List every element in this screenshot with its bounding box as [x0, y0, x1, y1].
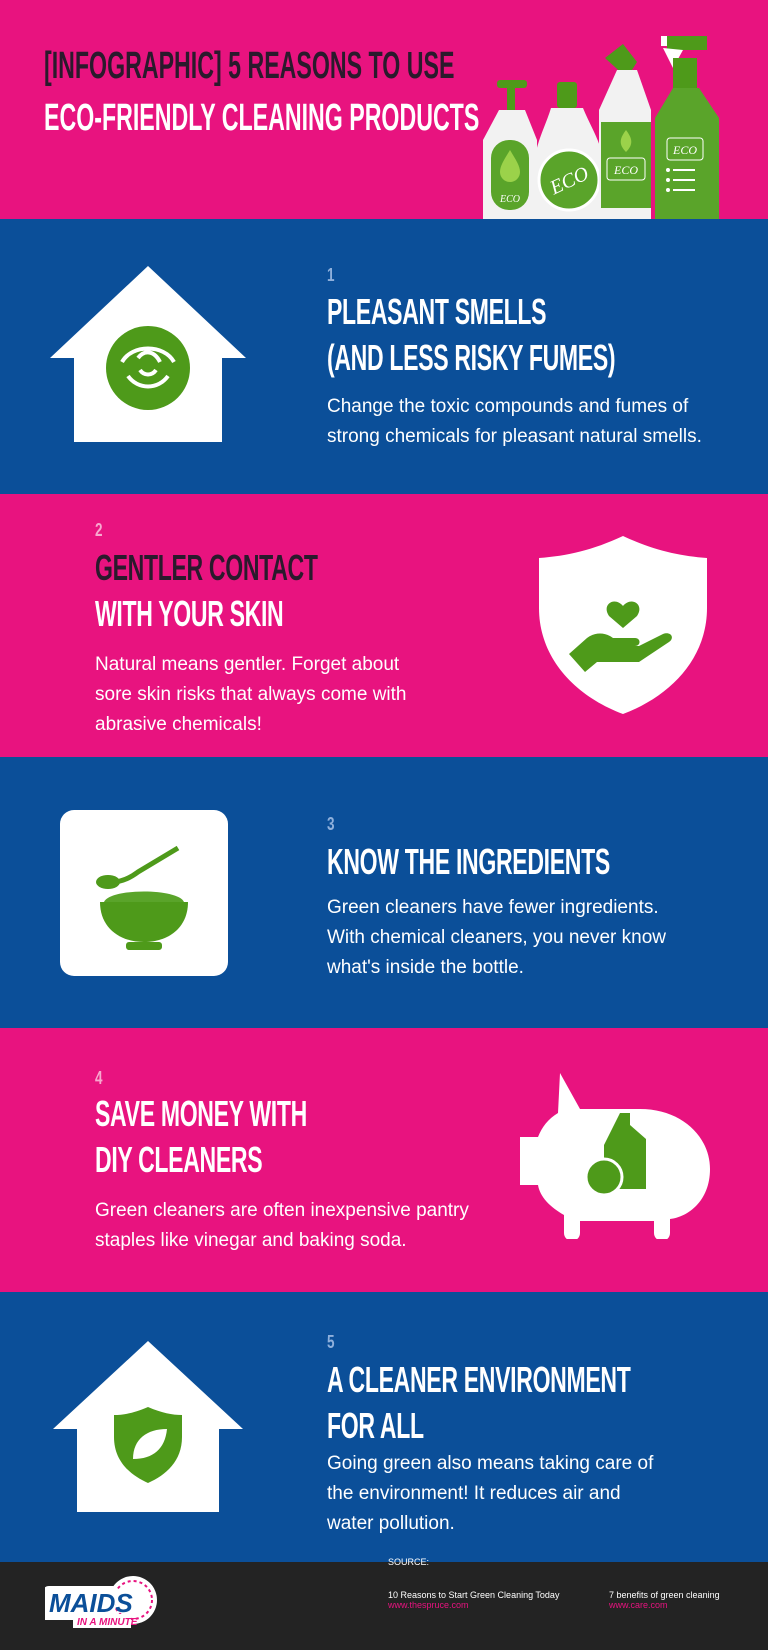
number 3: 3 — [327, 814, 335, 834]
panel: 5 cleaner environment — [0, 1292, 768, 1562]
number 1: 1 — [327, 265, 335, 285]
sources: www.thespruce.com — [388, 1600, 469, 1610]
panel: 2 gentler contact — [0, 494, 768, 757]
heading: SAVE MONEY WITH — [95, 1093, 307, 1134]
heading: WITH YOUR SKIN — [95, 593, 283, 634]
text — [95, 654, 406, 735]
text: strong chemicals for pleasant natural smells. — [327, 426, 702, 447]
logo — [45, 1576, 157, 1628]
icon: eco bottles: ECO — [546, 162, 592, 200]
text: what's inside the bottle. — [327, 957, 524, 978]
footer — [0, 1562, 768, 1650]
icon: house with shield leaf — [53, 1341, 243, 1512]
title: [INFOGRAPHIC] 5 REASONS TO USE — [44, 45, 454, 87]
icon: bowl with spoon — [60, 810, 228, 976]
text: water pollution. — [327, 1513, 455, 1534]
text: Change the toxic compounds and fumes of — [327, 396, 688, 417]
icon: eco bottles — [483, 36, 719, 219]
text: Natural means gentler. Forget about — [95, 654, 399, 675]
sources: www.care.com — [609, 1600, 668, 1610]
heading: (AND LESS RISKY FUMES) — [327, 337, 615, 378]
sources: SOURCE: — [388, 1557, 429, 1567]
icon: piggy bank — [520, 1073, 710, 1239]
text: Green cleaners have fewer ingredients. — [327, 897, 659, 918]
text — [327, 897, 666, 978]
heading — [95, 547, 318, 634]
heading: KNOW THE INGREDIENTS — [327, 841, 610, 882]
heading — [327, 1359, 631, 1446]
title: ECO-FRIENDLY CLEANING PRODUCTS — [44, 97, 479, 139]
text: Going green also means taking care of — [327, 1453, 653, 1474]
text: staples like vinegar and baking soda. — [95, 1230, 407, 1251]
heading: FOR ALL — [327, 1405, 424, 1446]
heading: A CLEANER ENVIRONMENT — [327, 1359, 630, 1400]
number 2: 2 — [95, 520, 103, 540]
title — [44, 45, 479, 139]
text: With chemical cleaners, you never know — [327, 927, 666, 948]
heading: PLEASANT SMELLS — [327, 291, 546, 332]
sources: 7 benefits of green cleaning — [609, 1590, 720, 1600]
heading: DIY CLEANERS — [95, 1139, 262, 1180]
sources — [388, 1557, 720, 1610]
text: Green cleaners are often inexpensive pantry — [95, 1200, 469, 1221]
heading: GENTLER CONTACT — [95, 547, 318, 588]
icon: shield hand heart — [539, 536, 707, 714]
icon: eco bottles: ECO — [672, 143, 697, 157]
text — [327, 1453, 654, 1534]
icon: eco bottles: ECO — [499, 194, 520, 205]
text: abrasive chemicals! — [95, 714, 262, 735]
text — [327, 396, 702, 447]
heading — [327, 291, 615, 378]
heading — [95, 1093, 307, 1180]
text: sore skin risks that always come with — [95, 684, 406, 705]
logo: MAIDS — [49, 1588, 133, 1618]
logo: IN A MINUTE — [77, 1617, 138, 1628]
number 4: 4 — [95, 1068, 103, 1088]
text: the environment! It reduces air and — [327, 1483, 621, 1504]
panel: 1 pleasant smells — [0, 219, 768, 494]
panel: 4 save money — [0, 1028, 768, 1292]
text — [95, 1200, 469, 1251]
icon: eco bottles: ECO — [613, 163, 638, 177]
number 5: 5 — [327, 1332, 335, 1352]
sources: 10 Reasons to Start Green Cleaning Today — [388, 1590, 559, 1600]
panel: 3 know the ingredients — [0, 757, 768, 1028]
header — [0, 0, 768, 219]
icon: house with rose — [50, 266, 246, 442]
